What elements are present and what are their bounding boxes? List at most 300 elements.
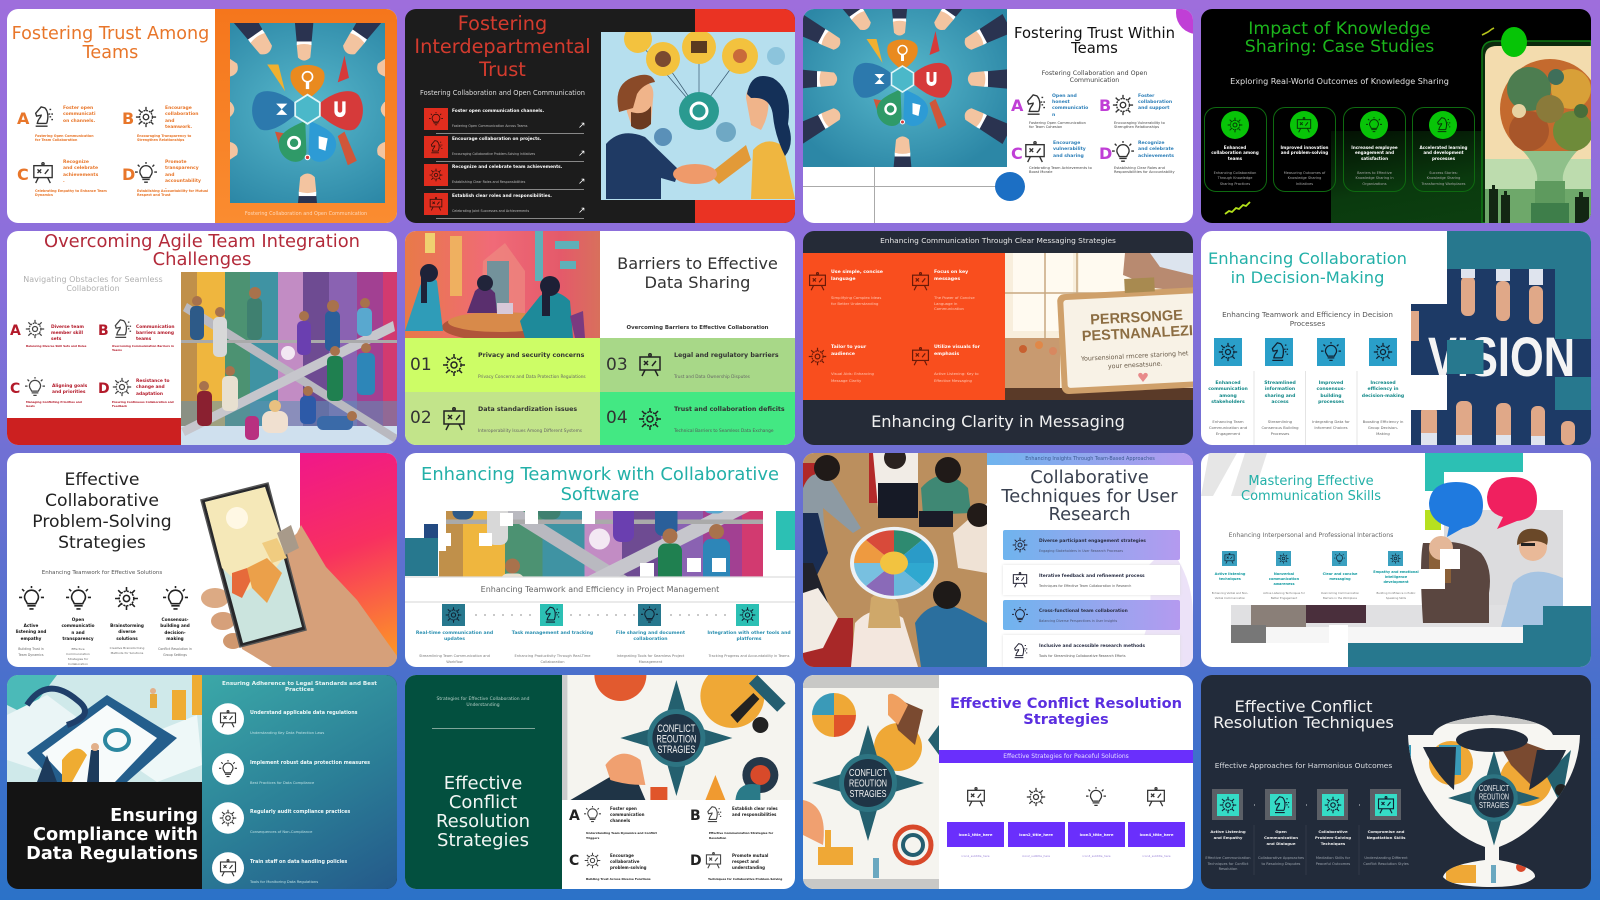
subtitle — [1201, 310, 1414, 328]
column 1: icon1_subtitle_here — [961, 854, 990, 858]
row 4: Establish clear roles and responsibilities. — [452, 194, 552, 198]
step 1: Real-time communication and — [416, 631, 493, 636]
step 2: Collaboration — [541, 660, 564, 664]
item C: Boost Morale — [1029, 170, 1052, 174]
column 4: making — [166, 636, 184, 641]
panel: Effective Collaborative Problem-Solving — [7, 453, 397, 667]
column 4: Building Confidence in Public — [1376, 591, 1415, 595]
item D — [1099, 140, 1175, 174]
column 4 — [1358, 338, 1408, 443]
column 2: Streamlining — [1268, 419, 1292, 424]
item C: Recognize — [63, 160, 89, 164]
column 1: Active — [24, 623, 38, 628]
title — [1201, 698, 1406, 732]
column 4: Speaking Skills — [1386, 596, 1406, 600]
case card 1: Through Knowledge — [1218, 176, 1252, 180]
subtitle: Effective Approaches for Harmonious Outcomes — [1215, 761, 1392, 770]
column 2 — [55, 586, 103, 666]
column 1: Communication and — [1209, 425, 1247, 430]
case card 2: Measuring Outcomes of — [1284, 170, 1325, 174]
image: compass inside trophy: STRAGIES — [1479, 801, 1509, 810]
column 1: communication — [1208, 387, 1248, 392]
column 3 — [1308, 789, 1358, 881]
image: idea bulb — [1481, 40, 1591, 223]
title: Data Regulations — [26, 844, 198, 864]
step 1: Streamlining Team Communication and — [419, 654, 490, 658]
item B: Strengthen Relationships — [1114, 125, 1159, 129]
subtitle: Practices — [285, 687, 314, 693]
sign small text: your enesatsune. — [1108, 360, 1163, 370]
column 1: icon1_title_here — [959, 832, 992, 837]
row 4 — [1003, 635, 1180, 667]
item 1: language — [831, 277, 856, 282]
column 4: decision- — [164, 630, 186, 635]
title: in Decision-Making — [1231, 268, 1384, 286]
subtitle: Overcoming Barriers to Effective Collaboration — [626, 325, 768, 331]
row 2: ↗ — [578, 149, 586, 159]
item C: Building Trust Across Diverse Functions — [586, 876, 651, 880]
image: conflict compass: REOUTION — [849, 778, 887, 790]
title — [617, 254, 778, 292]
divider lines and connector dots — [405, 575, 795, 625]
quadrant 04 — [600, 392, 795, 446]
item D — [98, 378, 174, 408]
item 4: Active Listening: Key to — [934, 371, 979, 376]
panel: Enhancing Teamwork with Collaborative Software — [405, 453, 795, 667]
item C: achievements — [63, 173, 98, 178]
column 2: Communication — [1264, 835, 1298, 840]
image: VISION with fists — [1411, 231, 1591, 445]
subtitle — [1042, 70, 1147, 84]
row 4: Inclusive and accessible research methods — [1039, 644, 1145, 649]
panel: Mastering Effective Communication Skills — [1201, 453, 1591, 667]
header bar: Enhancing Insights Through Team-Based Approaches — [1025, 456, 1155, 462]
panel: Fostering Trust Among Teams — [7, 8, 397, 222]
column 2: Communication — [66, 652, 90, 656]
subtitle: Processes — [1290, 318, 1325, 328]
column 4: intelligence — [1385, 574, 1407, 578]
item 2: The Power of Concise — [934, 295, 975, 300]
subtitle: Enhancing Teamwork for Effective Solutions — [42, 570, 162, 576]
top small text — [405, 697, 561, 709]
item C: C — [10, 381, 20, 397]
column 3: Integrating Data for — [1312, 419, 1350, 424]
row 4: Tools for Streamlining Collaborative Research Efforts — [1039, 654, 1126, 658]
rule — [432, 728, 535, 729]
item C: C — [569, 853, 579, 869]
step 2: Task management and tracking — [512, 631, 593, 636]
column 3 — [103, 586, 151, 664]
quadrant 02: Data standardization issues — [478, 406, 577, 412]
item C: vulnerability — [1053, 147, 1086, 152]
subtitle: Fostering Collaboration and Open Communication — [420, 88, 585, 96]
image: VISION with fists: VISION — [1428, 326, 1575, 388]
item C: Celebrating Empathy to Enhance Team — [35, 188, 107, 192]
row 1: Fostering Open Communication Across Teams — [452, 124, 527, 128]
row 3: Recognize and celebrate team achievements. — [452, 165, 562, 170]
column 3: Collaborative — [1318, 829, 1348, 834]
row 1 — [1003, 530, 1180, 560]
header bar — [987, 453, 1193, 465]
row 3: Consequences of Non-Compliance — [250, 830, 312, 834]
item D — [690, 852, 794, 887]
column 2: Active Listening Techniques for — [1263, 591, 1305, 595]
item B: and support — [1138, 106, 1169, 111]
item B: Communication — [136, 325, 174, 330]
item 1 — [809, 270, 883, 306]
item D: . — [165, 186, 167, 191]
green side panel — [405, 675, 562, 889]
title: Ensuring — [110, 806, 198, 826]
item B: Strengthen Relationships — [137, 138, 184, 142]
column 4: Boosting Efficiency in — [1363, 419, 1403, 424]
item C: Celebrating Team Achievements to — [1029, 166, 1092, 170]
handshake — [673, 164, 717, 184]
column 1 — [947, 785, 1005, 865]
column 4: icon4_subtitle_here — [1142, 854, 1171, 858]
title — [414, 12, 591, 81]
title: Mastering Effective — [1248, 474, 1374, 488]
image: conflict compass: REOUTION — [656, 733, 696, 745]
column 4: icon4_title_here — [1140, 832, 1173, 837]
case card 1: Enhanced — [1224, 144, 1246, 150]
panel: Ensuring Compliance with Data Regulations — [7, 675, 397, 889]
case card 2: Initiatives — [1296, 182, 1313, 186]
panel: Impact of Knowledge Sharing — [1201, 8, 1591, 222]
column 1: Active listening — [1215, 572, 1245, 576]
column 4: Conflict Resolution Styles — [1363, 862, 1409, 866]
title: Challenges — [153, 249, 251, 270]
case card 1: collaboration among — [1211, 150, 1259, 155]
column 1: Enhancing Verbal and Non- — [1212, 591, 1248, 595]
item A: Understanding Team Dynamics and Conflict Triggers — [586, 831, 657, 840]
column 3: Overcoming Communication — [1321, 591, 1359, 595]
title: Conflict — [449, 792, 517, 813]
case card 1: Enhancing Collaboration — [1214, 170, 1256, 174]
item B: Foster — [1138, 94, 1154, 98]
column 3: solutions — [116, 636, 138, 641]
item B — [122, 106, 198, 142]
item D: D — [98, 381, 110, 397]
item A: A — [10, 323, 21, 339]
item A: Foster open — [63, 106, 93, 110]
title: Collaborative — [1030, 467, 1149, 488]
item D: D — [1099, 144, 1112, 162]
quadrant 02: 02 — [410, 408, 432, 428]
image: sign on desk — [1005, 253, 1193, 400]
title: Resolution Techniques — [1213, 713, 1394, 732]
item C — [17, 160, 107, 196]
row 4: Celebrating Joint Successes and Achievements — [452, 208, 529, 212]
column 2: Open — [72, 617, 84, 622]
title — [44, 231, 360, 270]
column 2: Better Engagement — [1271, 596, 1297, 600]
item B: Effective Communication Strategies for Resolution — [709, 831, 773, 840]
row 1: ↗ — [578, 120, 586, 130]
case card 4: processes — [1432, 156, 1455, 161]
item D: Establishing Clear Roles and — [1114, 166, 1165, 170]
step 1: updates — [444, 637, 465, 642]
row 1 — [212, 703, 390, 735]
subtitle: Exploring Real-World Outcomes of Knowledge Sharing — [1230, 76, 1449, 86]
item D: Resistance to — [136, 379, 170, 384]
title — [1201, 248, 1414, 286]
purple strip — [939, 750, 1193, 763]
title: Enhancing Teamwork with Collaborative — [421, 464, 779, 485]
item B: B — [122, 108, 134, 128]
row 3 — [212, 802, 390, 834]
column 2 — [1259, 551, 1309, 601]
item C: Encourage — [610, 853, 634, 858]
column 2: sharing and — [1265, 394, 1295, 399]
image: conflict compass: CONFLICT — [849, 767, 887, 779]
item 4 — [911, 344, 1003, 389]
image: compass inside trophy: REOUTION — [1479, 792, 1509, 802]
item B — [690, 805, 794, 839]
subtitle: Enhancing Teamwork and Efficiency in Project Management — [481, 585, 719, 594]
panel: Effective Conflict Resolution Strategies (green) — [405, 675, 795, 889]
step 2: Enhancing Productivity Through Real-Time — [514, 654, 590, 658]
title: Effective Conflict — [1234, 696, 1372, 716]
teal gradient side — [202, 675, 397, 889]
column 2: communication — [1269, 577, 1299, 581]
item B: Encouraging Transparency to — [137, 134, 191, 138]
item B: and responsibilities — [732, 812, 776, 817]
column 3: messaging — [1329, 577, 1351, 581]
row 2: Encouraging Collaborative Problem-Solving Initiatives — [452, 152, 535, 156]
item A: Foster open — [610, 806, 637, 811]
column 3 — [1306, 338, 1356, 443]
item C: C — [17, 164, 29, 184]
item C: Aligning goals — [52, 384, 87, 389]
item 2: Focus on key — [934, 270, 968, 275]
item B: Encourage — [165, 106, 192, 110]
row 2 — [1003, 565, 1180, 595]
column 1: stakeholders — [1211, 400, 1245, 405]
row 2 — [424, 136, 586, 162]
title: Interdepartmental — [414, 35, 591, 58]
column 1 — [1203, 789, 1253, 881]
quadrant 04: Technical Barriers to Seamless Data Exchange — [674, 428, 774, 434]
title: Fostering Trust Within — [1014, 25, 1175, 42]
title: Problem-Solving — [32, 512, 172, 532]
column 4: Group Settings — [163, 653, 187, 657]
red base block — [7, 418, 181, 446]
title: Resolution — [436, 811, 530, 832]
title: Teams — [1071, 40, 1118, 57]
item B: B — [1099, 96, 1111, 114]
column 3: Problem-Solving — [1315, 835, 1351, 840]
image: conflict compass: STRAGIES — [850, 788, 886, 800]
case card 1: Sharing Practices — [1220, 182, 1250, 186]
item B: teamwork. — [165, 125, 192, 130]
title — [939, 696, 1193, 728]
orange block — [803, 253, 1004, 400]
item 4: emphasis — [934, 352, 959, 357]
column 3 — [1068, 785, 1126, 865]
subtitle: Collaboration — [66, 284, 120, 292]
item A: Open and — [1052, 94, 1077, 98]
row 4: Train staff on data handling policies — [250, 860, 347, 865]
item C: and priorities — [52, 390, 85, 395]
title — [1014, 25, 1175, 57]
column 1 — [7, 586, 55, 664]
column 4: Empathy and emotional — [1373, 570, 1419, 574]
top small text: Strategies for Effective Collaboration and — [436, 697, 529, 702]
row 4: Tools for Monitoring Data Regulations — [250, 880, 318, 884]
title: Research — [1048, 504, 1131, 525]
item B: Overcoming Communication Barriers in Teams — [112, 344, 174, 352]
row 2: Implement robust data protection measures — [250, 761, 370, 766]
step 3: File sharing and document — [616, 631, 685, 636]
step 3 — [608, 604, 693, 664]
row 2: Techniques for Effective Team Collaboration in Research — [1039, 584, 1131, 588]
case card 4: Success Stories: — [1429, 170, 1458, 174]
step 3: collaboration — [633, 637, 668, 642]
title: Effective — [64, 470, 140, 490]
quadrant 04: 04 — [606, 408, 628, 428]
title: Fostering — [458, 12, 547, 35]
title: Strategies — [1023, 710, 1109, 728]
purple corner — [1176, 9, 1193, 34]
column 4: Understanding Different — [1364, 856, 1408, 860]
purple strip: Effective Strategies for Peaceful Solutions — [1003, 753, 1129, 760]
lower grid lines and blue dot — [803, 167, 1025, 223]
step 3: Integrating Tools for Seamless Project — [617, 654, 684, 658]
item B: barriers among — [136, 331, 174, 336]
panel: Collaborative Techniques for User Research — [803, 453, 1193, 667]
item C: Encourage — [1053, 140, 1080, 146]
image: compass inside trophy — [1254, 715, 1580, 887]
column 3: Peaceful Outcomes — [1316, 862, 1350, 866]
item A: communicatio — [1052, 106, 1088, 111]
item C: C — [1011, 144, 1023, 162]
row 2: Best Practices for Data Compliance — [250, 780, 314, 784]
column 4 — [1371, 551, 1421, 601]
column 3: diverse — [118, 629, 136, 634]
column 2: icon2_title_here — [1019, 832, 1053, 837]
column 1: Effective Communication — [1205, 856, 1251, 860]
panel: Fostering Interdepartmental Trust — [405, 8, 795, 222]
row 3: Regularly audit compliance practices — [250, 810, 350, 815]
column 3: Techniques — [1321, 841, 1345, 846]
column 3: Brainstorming — [110, 623, 144, 628]
item 4: Utilize visuals for — [934, 345, 980, 350]
column 2: Effective — [71, 647, 85, 651]
row 3: ↗ — [578, 177, 586, 187]
column 1: Active Listening — [1210, 829, 1246, 834]
step 4 — [705, 604, 793, 664]
subtitle: Enhancing Teamwork and Efficiency in Decision — [1222, 310, 1393, 318]
item D: Promote — [165, 160, 187, 164]
item 3: audience — [831, 352, 855, 357]
panel: Fostering Trust Within Teams — [803, 8, 1193, 222]
image: hand holding phone — [187, 473, 397, 667]
quadrant 02 — [405, 392, 600, 446]
item C: Dynamics — [35, 192, 53, 196]
column 2: Processes — [1271, 431, 1289, 436]
column 4 — [151, 586, 199, 664]
case card 4: and development — [1423, 150, 1464, 155]
column 4 — [1361, 789, 1411, 881]
column 3: building — [1320, 394, 1342, 399]
column 2: Strategies for — [68, 657, 88, 661]
quadrant 03: 03 — [606, 355, 628, 375]
man — [606, 133, 679, 198]
item A: sets — [51, 337, 61, 342]
column 3: Mediation Skills for — [1316, 856, 1350, 860]
title: Data Sharing — [645, 272, 750, 292]
title: Software — [561, 484, 639, 505]
column 4: Increased — [1370, 381, 1396, 386]
step 3: Management — [639, 660, 662, 664]
subtitle: Enhancing Interpersonal and Professional Interactions — [1229, 532, 1393, 539]
title — [405, 465, 795, 505]
case card 4: Transforming Workplaces — [1421, 182, 1466, 186]
column 3: Clear and concise — [1323, 572, 1357, 576]
title: Impact of Knowledge — [1248, 19, 1431, 39]
item A: communicati — [63, 112, 95, 117]
item A: for Team Collaboration — [35, 138, 77, 142]
title: Strategies — [58, 533, 146, 553]
case card 3: Barriers to Effective — [1357, 170, 1392, 174]
image: meeting photo with shapes — [1201, 453, 1591, 667]
item 3 — [808, 344, 874, 383]
item A: Balancing Diverse Skill Sets and Roles — [26, 344, 86, 348]
title — [1201, 474, 1421, 504]
column 2 — [1008, 785, 1066, 865]
column 2: transparency — [62, 636, 94, 641]
item A: honest — [1052, 100, 1070, 105]
image: hands around hub — [230, 23, 385, 203]
quadrant 03: Legal and regulatory barriers — [674, 352, 779, 359]
column 1: Engagement — [1216, 431, 1240, 436]
case card 4: Accelerated learning — [1420, 144, 1467, 150]
quadrant 01: Privacy Concerns and Data Protection Regulations — [478, 375, 586, 380]
item A: Diverse team — [51, 325, 84, 330]
case card 2: Improved innovation — [1281, 144, 1328, 150]
row 4 — [212, 852, 390, 884]
item 3: Message Clarity — [831, 378, 861, 383]
item C: collaborative — [610, 859, 639, 864]
column 3: Methods for Solutions — [111, 651, 143, 655]
title: Communication Skills — [1241, 488, 1381, 504]
item 3: Tailor to your — [831, 345, 866, 350]
title: Collaborative — [45, 491, 159, 511]
column 3: Barriers in the Workplace — [1323, 596, 1357, 600]
column 4: building and — [160, 623, 190, 628]
header strip text: Enhancing Communication Through Clear Messaging Strategies — [880, 236, 1116, 245]
item D: accountability — [165, 179, 201, 184]
column 3: Informed Choices — [1314, 425, 1348, 430]
case card 2: Knowledge Sharing — [1288, 176, 1321, 180]
item D: Responsibilities for Accountability — [1114, 170, 1175, 174]
column 1 — [1205, 551, 1255, 601]
item D: understanding — [732, 865, 765, 870]
quadrant 04: Trust and collaboration deficits — [674, 406, 785, 412]
green top dot — [1501, 27, 1527, 57]
subtitle — [202, 681, 397, 694]
image: conflict compass — [562, 675, 795, 800]
item C: and sharing — [1053, 154, 1084, 159]
title: Trust — [479, 58, 526, 81]
step 1 — [412, 604, 497, 664]
image: conflict compass: STRAGIES — [657, 744, 695, 756]
row 1: Understand applicable data regulations — [250, 711, 357, 716]
column 2: information — [1265, 387, 1295, 392]
item B — [98, 319, 174, 352]
item 4: Effective Messaging — [934, 378, 972, 383]
